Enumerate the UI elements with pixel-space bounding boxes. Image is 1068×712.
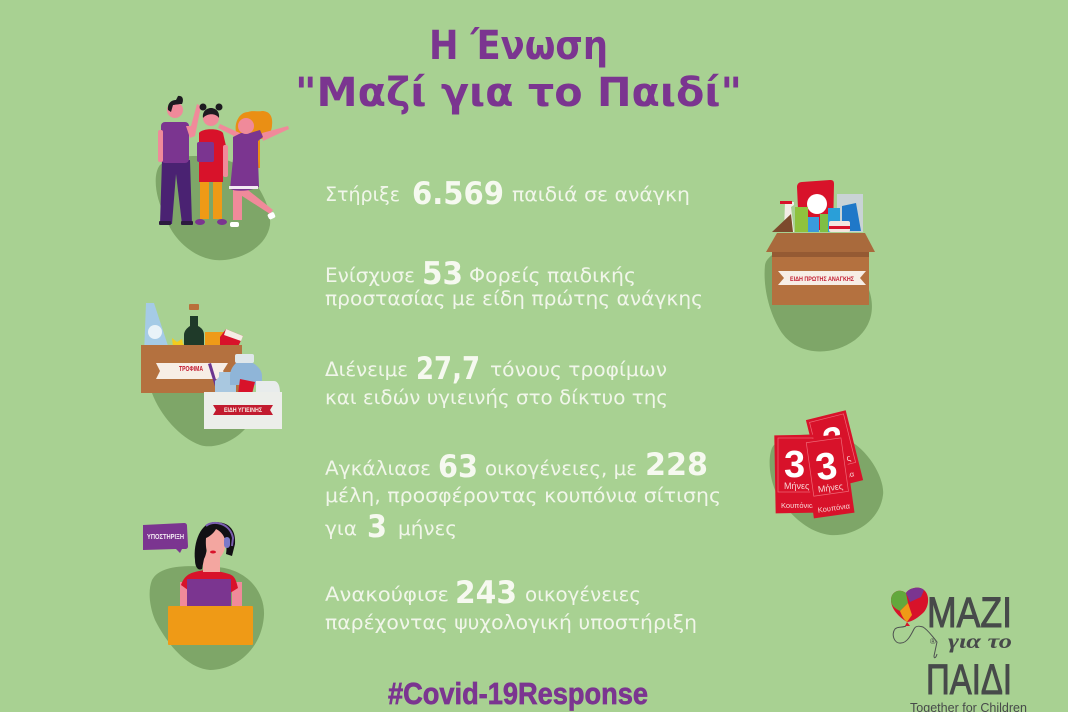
food box — [141, 345, 242, 393]
blob behind children — [156, 156, 270, 260]
stat: children supported: παιδιά σε ανάγκη — [512, 183, 690, 206]
ribbon label — [778, 271, 866, 285]
stat: families with coupons: 63 — [438, 449, 478, 485]
hashtag: #Covid-19Response — [388, 676, 648, 711]
blob behind box — [765, 246, 872, 351]
stat: children supported: Στήριξε — [325, 183, 400, 206]
title: Η Ένωση — [429, 23, 608, 69]
stat: children supported — [325, 176, 690, 212]
logo wordmark: ΜΑΖΙ — [927, 589, 1012, 637]
front coupon: Κουπόνια — [817, 501, 851, 515]
illustration: food and hygiene boxes — [141, 303, 282, 446]
stat: families with coupons: Αγκάλιασε — [325, 457, 431, 480]
left coupon: Κουπόνια — [781, 501, 814, 510]
hygiene items — [208, 354, 280, 394]
blob behind operator — [150, 566, 264, 670]
front coupon — [803, 434, 855, 518]
stat: families with coupons: μέλη, προσφέροντας κουπόνια σίτισης — [325, 484, 721, 507]
box contents — [780, 180, 863, 232]
hygiene ribbon: ΕΙΔΗ ΥΓΙΕΙΝΗΣ — [224, 407, 262, 414]
stat: tonnes of food — [325, 351, 668, 409]
back coupon: ες — [841, 452, 852, 464]
illustration: group of children — [156, 96, 289, 260]
speech bubble — [143, 523, 188, 553]
speech bubble: ΥΠΟΣΤΗΡΙΞΗ — [147, 534, 184, 541]
title: "Μαζί για το Παιδί" — [295, 70, 742, 116]
stat: families with coupons: 228 — [645, 447, 708, 483]
illustration: meal coupons — [770, 410, 883, 535]
stat: families with coupons: μήνες — [398, 517, 457, 540]
food ribbon — [156, 363, 228, 379]
stat: families with coupons: για — [325, 517, 357, 540]
stat: psychological support: 243 — [455, 575, 517, 611]
stat: families with coupons: 3 — [367, 509, 387, 545]
logo wordmark — [910, 589, 1027, 712]
front coupon: Μήνες — [817, 481, 844, 494]
stat: organisations: Ενίσχυσε — [325, 264, 415, 287]
illustration: support operator — [143, 522, 264, 670]
stat: psychological support: Ανακούφισε — [325, 583, 449, 606]
stat: tonnes of food: Διένειμε — [325, 358, 408, 381]
girl in red — [195, 104, 228, 225]
stat: families with coupons: οικογένειες, με — [485, 457, 637, 480]
food ribbon: ΤΡΟΦΙΜΑ — [179, 366, 203, 373]
girl in purple — [218, 111, 289, 227]
stat: tonnes of food: τόνους τροφίμων — [490, 358, 667, 381]
stat: organisations: 53 — [422, 256, 463, 292]
back coupon: νια — [843, 469, 856, 480]
blob behind coupons — [770, 434, 883, 535]
illustration: box of essentials — [765, 180, 875, 351]
stat: children supported: 6.569 — [412, 176, 504, 212]
logo wordmark: ΠΑΙΔΙ — [926, 656, 1012, 704]
stat: psychological support: παρέχοντας ψυχολογική υποστήριξη — [325, 611, 697, 634]
ribbon label: ΕΙΔΗ ΠΡΩΤΗΣ ΑΝΑΓΚΗΣ — [790, 276, 854, 283]
stat: families with coupons — [325, 447, 721, 545]
stat: organisations: προστασίας με είδη πρώτης ανάγκης — [325, 287, 703, 310]
stat: organisations — [325, 256, 703, 310]
food items — [144, 303, 243, 357]
stat: tonnes of food: και ειδών υγιεινής στο δίκτυο της — [325, 386, 668, 409]
stat: psychological support — [325, 575, 697, 634]
back coupon — [806, 410, 863, 490]
left coupon: 3 — [784, 444, 805, 486]
stat: tonnes of food: 27,7 — [416, 351, 480, 387]
logo heart balloon — [891, 588, 937, 658]
hygiene ribbon — [213, 405, 273, 415]
stat: organisations: Φορείς παιδικής — [469, 264, 636, 287]
hygiene box — [204, 392, 282, 429]
title — [295, 23, 742, 116]
blob behind boxes — [152, 393, 248, 446]
back coupon: 3 — [819, 417, 848, 462]
desk — [168, 606, 253, 645]
logo: Mazi gia to Paidi — [891, 588, 1027, 712]
front coupon: 3 — [813, 445, 840, 489]
person — [180, 522, 242, 612]
left coupon — [774, 435, 817, 513]
logo wordmark: ® — [930, 637, 936, 646]
stat: psychological support: οικογένειες — [525, 583, 641, 606]
boy — [158, 96, 201, 225]
left coupon: Μήνες — [784, 481, 810, 491]
logo wordmark: για το — [948, 631, 1012, 653]
box — [766, 233, 875, 252]
